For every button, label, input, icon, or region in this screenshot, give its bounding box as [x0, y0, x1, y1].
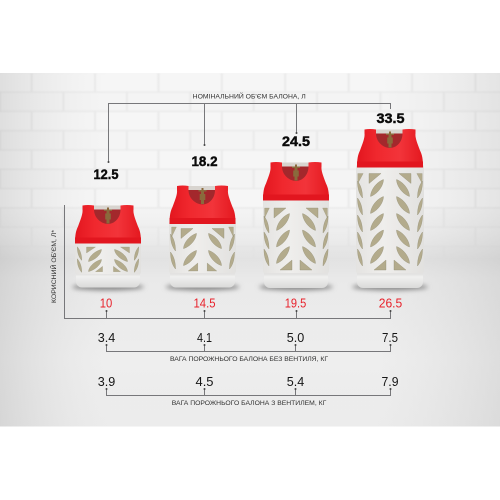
cylinder 24.5 — [259, 162, 333, 290]
usable volume values — [100, 296, 402, 310]
row: weight with valve: 7.9 — [382, 375, 399, 389]
row: weight without valve: 7.5 — [382, 331, 398, 345]
row: weight with valve: 4.5 — [196, 375, 214, 389]
label: usable volume: КОРИСНИЙ ОБ'ЄМ, Л* — [49, 229, 58, 303]
row: weight with valve: 3.9 — [98, 375, 115, 389]
heading: nominal volume: НОМІНАЛЬНИЙ ОБ'ЄМ БАЛОНА, Л — [193, 92, 306, 101]
row: weight without valve: 4.1 — [197, 331, 212, 345]
row: weight without valve — [98, 331, 398, 363]
nominal volume values: 18.2 — [192, 153, 218, 169]
background: brick wall and floor — [0, 60, 500, 426]
nominal volume values: 24.5 — [282, 133, 310, 149]
usable volume values: 10 — [100, 296, 112, 310]
cylinder 12.5 — [72, 205, 144, 290]
row: weight without valve: 5.0 — [287, 331, 304, 345]
cylinder 33.5 — [352, 129, 428, 290]
label: weight with valve: ВАГА ПОРОЖНЬОГО БАЛОНА З ВЕНТИЛЕМ, КГ — [172, 400, 327, 407]
usable volume values: 14.5 — [194, 296, 216, 310]
bracket: usable volume — [49, 205, 391, 318]
nominal volume values: 33.5 — [376, 110, 405, 126]
nominal volume values: 12.5 — [94, 166, 119, 182]
nominal volume values — [94, 110, 405, 182]
label: weight without valve: ВАГА ПОРОЖНЬОГО БАЛОНА БЕЗ ВЕНТИЛЯ, КГ — [170, 356, 329, 363]
usable volume values: 19.5 — [285, 296, 306, 310]
bracket: nominal volume — [108, 92, 390, 163]
row: weight with valve — [98, 375, 399, 407]
row: weight with valve: 5.4 — [287, 375, 304, 389]
usable volume values: 26.5 — [379, 296, 402, 310]
row: weight without valve: 3.4 — [98, 331, 115, 345]
cylinder 18.2 — [166, 186, 240, 290]
